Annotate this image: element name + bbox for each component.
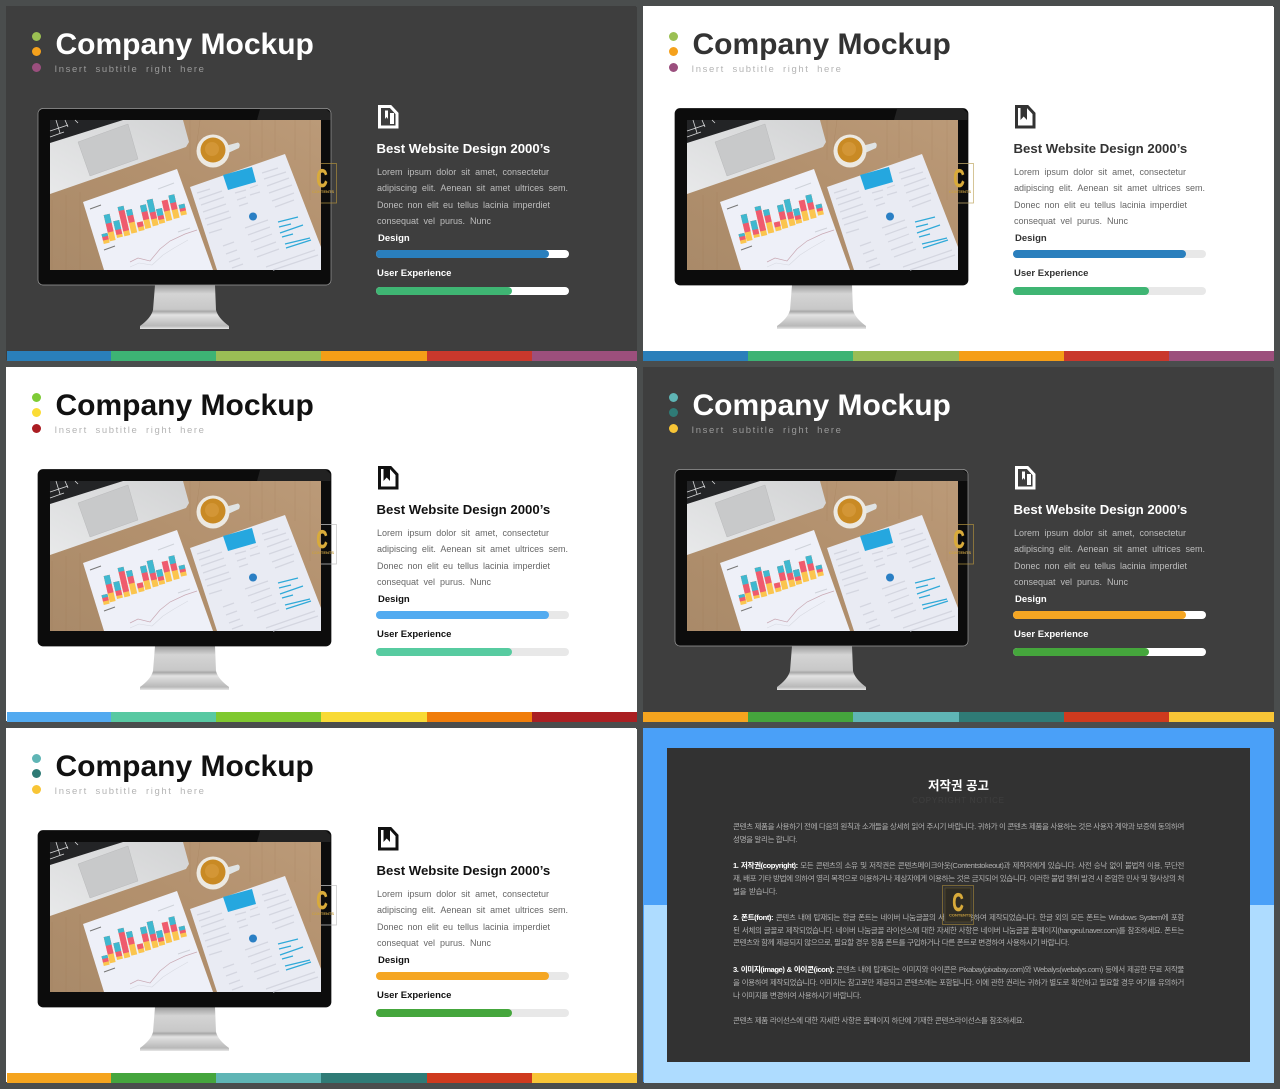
text: image and icon clause: 나 이미지를 변경하여 사용하시기 바랍니다.	[733, 991, 861, 1000]
logo watermark: CONTENTS	[949, 189, 971, 194]
progress bar: User Experience	[1013, 287, 1206, 295]
body text: adipiscing elit. Aenean sit amet ultrices sem.	[1014, 183, 1205, 193]
logo watermark	[312, 163, 337, 204]
panel: copyright notice slide	[644, 729, 1274, 1083]
text: font clause	[733, 913, 1184, 947]
monitor mockup	[38, 469, 332, 690]
body text: Lorem ipsum dolor sit amet, consectetur	[377, 528, 549, 538]
body text: consequat vel purus. Nunc	[377, 577, 491, 587]
title: Company Mockup	[56, 389, 314, 422]
heading: Best Website Design 2000’s	[1014, 502, 1187, 517]
title: Company Mockup	[692, 389, 951, 422]
body text: consequat vel purus. Nunc	[377, 216, 491, 226]
colour band	[7, 351, 637, 361]
text: font clause: 된 서체의 글꼴로 제작되었습니다. 네이버 나눔글꼴 라이선스에 대한 자세한 사항은 네이버 나눔글꼴 홈페이지(hangeul.naver.com)를 참조하세요. 폰트는	[733, 926, 1184, 935]
logo watermark: CONTENTS	[949, 912, 971, 918]
panel: dark slide 1	[7, 7, 637, 361]
body text: consequat vel purus. Nunc	[377, 938, 491, 948]
label: User Experience: User Experience	[1014, 268, 1088, 279]
body text: Lorem ipsum dolor sit amet, consectetur	[377, 167, 549, 177]
text: copyright clause: 벌을 받습니다.	[733, 887, 777, 896]
subtitle: Insert subtitle right here	[692, 425, 842, 436]
logo watermark: CONTENTS	[312, 911, 334, 916]
icon: bookmark document	[1015, 466, 1036, 490]
progress bar: User Experience	[376, 287, 569, 295]
colour band	[7, 712, 637, 722]
monitor mockup	[38, 830, 332, 1051]
body text: Lorem ipsum dolor sit amet, consectetur	[1014, 528, 1186, 538]
progress bar: User Experience	[376, 1009, 569, 1017]
text: license note: 콘텐츠 제품 라이선스에 대한 자세한 사항은 홈페이지 하단에 기재한 콘텐츠라이선스를 참조하세요.	[733, 1016, 1024, 1025]
logo watermark: C	[954, 526, 964, 554]
panel: copyright text card	[667, 748, 1250, 1062]
text: font clause: 콘텐츠와 함께 제공되지 않으므로, 필요할 경우 정품 폰트를 구입하거나 다른 폰트로 변경하여 사용하시기 바랍니다.	[733, 938, 1069, 947]
body text	[1014, 528, 1205, 587]
body text	[377, 889, 568, 948]
icon: bookmark document	[1015, 105, 1036, 128]
logo watermark: C	[954, 165, 964, 193]
progress bar: Design	[376, 972, 569, 980]
progress bar: Design	[1013, 611, 1206, 619]
subtitle: Insert subtitle right here	[692, 64, 842, 75]
panel: light slide 5	[7, 729, 637, 1083]
text: copyright clause	[733, 861, 1184, 896]
text: copyright clause: 1. 저작권(copyright): 모든 콘텐츠의 소유 및 저작권은 콘텐츠메이크아웃(Contentstokeout)과 제작자에게 있습니다. 사전 승낙 없이 불법적 이용, 무단전	[733, 861, 1184, 870]
panel: dark slide 4	[644, 368, 1274, 722]
logo watermark: CONTENTS	[312, 550, 334, 555]
body text: adipiscing elit. Aenean sit amet ultrices sem.	[377, 905, 568, 915]
label: User Experience: User Experience	[377, 629, 451, 640]
colour band	[7, 1073, 637, 1083]
text: font clause: 2. 폰트(font): 콘텐츠 내에 탑재되는 한글 폰트는 네이버 나눔글꼴의 서체를 이용하여 제작되었습니다. 한글 외의 모든 폰트는 Windows System에 포함	[733, 913, 1184, 922]
logo watermark: C	[952, 889, 964, 917]
body text: adipiscing elit. Aenean sit amet ultrices sem.	[377, 183, 568, 193]
colour band	[643, 351, 1274, 361]
heading: Best Website Design 2000’s	[376, 863, 550, 878]
text: image and icon clause: 3. 이미지(image) & 아이콘(icon): 콘텐츠 내에 탑재되는 이미지와 아이콘은 Pixabay(pixabay.com)와 Webalys(webalys.com) 등에서 제공한 무료 저작물	[733, 965, 1184, 974]
progress bar: User Experience	[376, 648, 569, 656]
progress bar: Design	[376, 250, 569, 258]
body text	[377, 528, 568, 587]
progress bar: Design	[1013, 250, 1206, 258]
label: User Experience: User Experience	[377, 990, 451, 1001]
icon: bookmark document	[378, 827, 398, 850]
label: Design: Design	[378, 233, 410, 244]
body text: Lorem ipsum dolor sit amet, consectetur	[1014, 167, 1186, 177]
text: copyright clause: 재, 배포 기타 방법에 의하여 영리 목적으로 이용하거나 제삼자에게 이용하는 것은 금지되어 있습니다. 이러한 불법 행위 발견 시 준엄한 민사 및 형사상의 처	[733, 874, 1184, 883]
label: Design: Design	[378, 955, 410, 966]
logo watermark	[949, 524, 974, 564]
text: image and icon clause	[733, 965, 1184, 1000]
body text: Lorem ipsum dolor sit amet, consectetur	[377, 889, 549, 899]
body text	[377, 167, 568, 226]
icon: title dots	[669, 32, 678, 72]
monitor mockup	[674, 108, 968, 329]
body text: Donec non elit eu tellus lacinia imperdiet	[377, 922, 550, 932]
icon: title dots	[32, 393, 41, 433]
logo watermark: CONTENTS	[312, 189, 334, 194]
label: Design: Design	[378, 594, 410, 605]
body text: adipiscing elit. Aenean sit amet ultrices sem.	[377, 544, 568, 554]
panel: light slide 3	[7, 368, 637, 722]
title: Company Mockup	[56, 750, 314, 783]
subtitle: Insert subtitle right here	[54, 425, 206, 436]
body text	[1014, 167, 1205, 226]
logo watermark: C	[316, 526, 328, 554]
monitor mockup	[38, 108, 332, 329]
heading: Best Website Design 2000’s	[1014, 141, 1187, 156]
text: image and icon clause: 을 이용하여 제작되었습니다. 이미지는 참고로만 제공되고 콘텐츠에는 포함됩니다. 이에 관한 권리는 귀하가 별도로 확인하고 필요할 경우 여기를 유의하거	[733, 978, 1184, 987]
body text: adipiscing elit. Aenean sit amet ultrices sem.	[1014, 544, 1205, 554]
heading: Best Website Design 2000’s	[376, 141, 550, 156]
title: Company Mockup	[56, 28, 314, 61]
heading: copyright notice: 저작권 공고	[928, 779, 989, 793]
colour band	[643, 712, 1274, 722]
text: introduction	[733, 822, 1184, 844]
logo watermark: C	[316, 165, 328, 193]
subtitle: Insert subtitle right here	[54, 64, 206, 75]
logo watermark: C	[316, 887, 328, 915]
icon: bookmark document	[378, 105, 398, 128]
subheading: copyright notice: COPYRIGHT NOTICE	[912, 796, 1005, 805]
subtitle: Insert subtitle right here	[54, 786, 206, 797]
label: Design: Design	[1015, 233, 1047, 244]
icon: title dots	[669, 393, 678, 433]
logo watermark: CONTENTS	[949, 550, 971, 555]
label: User Experience: User Experience	[377, 268, 451, 279]
title: Company Mockup	[692, 28, 951, 61]
text: introduction: 콘텐츠 제품을 사용하기 전에 다음의 원칙과 소개들을 상세히 읽어 주시기 바랍니다. 귀하가 이 콘텐츠 제품을 사용하는 것은 사용자 계약과 보증에 동의하여	[733, 822, 1184, 831]
panel: light slide 2	[644, 7, 1274, 361]
body text: consequat vel purus. Nunc	[1014, 577, 1128, 587]
logo watermark	[312, 524, 337, 564]
text: introduction: 성명을 알리는 합니다.	[733, 835, 797, 844]
heading: Best Website Design 2000’s	[376, 502, 550, 517]
monitor mockup	[674, 469, 968, 690]
body text: consequat vel purus. Nunc	[1014, 216, 1128, 226]
icon: title dots	[32, 754, 41, 794]
label: Design: Design	[1015, 594, 1047, 605]
progress bar: Design	[376, 611, 569, 619]
logo watermark	[312, 885, 337, 926]
progress bar: User Experience	[1013, 648, 1206, 656]
body text: Donec non elit eu tellus lacinia imperdiet	[377, 200, 550, 210]
body text: Donec non elit eu tellus lacinia imperdiet	[377, 561, 550, 571]
body text: Donec non elit eu tellus lacinia imperdiet	[1014, 200, 1187, 210]
icon: title dots	[32, 32, 41, 72]
label: User Experience: User Experience	[1014, 629, 1088, 640]
icon: bookmark document	[378, 466, 398, 490]
logo watermark	[942, 885, 974, 925]
logo watermark	[949, 163, 974, 204]
body text: Donec non elit eu tellus lacinia imperdiet	[1014, 561, 1187, 571]
